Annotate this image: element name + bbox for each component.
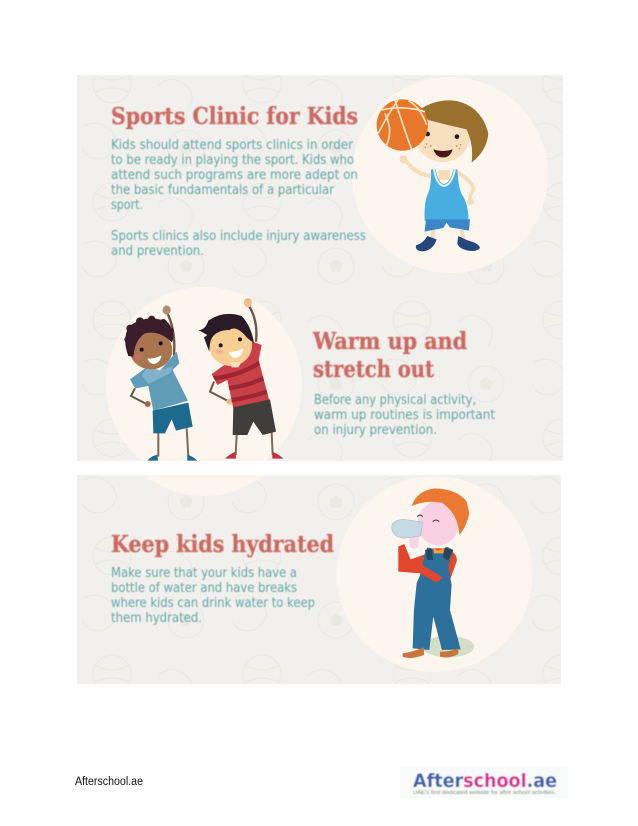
text block: warm up description: Before any physical activity, — [314, 393, 476, 408]
text block: sports clinic description: the basic fundamentals of a particular — [111, 183, 335, 198]
logo: Afterschool.ae: UAE's first dedicated website for after school activities. — [413, 790, 556, 796]
text block: sports clinic description: Sports clinics also include injury awareness — [111, 229, 366, 244]
text block: sports clinic description — [111, 138, 366, 259]
illustration: boy drinking water — [392, 488, 474, 658]
text block: sports clinic description: attend such programs are more adept on — [111, 168, 358, 183]
right boy — [198, 298, 283, 459]
logo: Afterschool.ae — [400, 767, 568, 799]
heading: Warm up and stretch out: stretch out — [313, 356, 434, 383]
left boy — [124, 305, 197, 461]
text block: hydration description: where kids can drink water to keep — [111, 596, 315, 611]
panel: keep kids hydrated — [77, 475, 561, 684]
text block: hydration description — [111, 566, 315, 626]
text block: warm up description: on injury prevention. — [314, 423, 437, 438]
text block: sports clinic description: to be ready in playing the sport. Kids who — [111, 153, 354, 168]
text block: hydration description: Make sure that your kids have a — [111, 566, 297, 581]
illustration: two kids stretching — [124, 298, 283, 461]
heading: Warm up and stretch out — [312, 328, 467, 383]
heading: Keep kids hydrated: Keep kids hydrated — [111, 531, 334, 558]
panel: sports clinic and warm up — [77, 75, 563, 483]
infographic page — [75, 75, 563, 795]
text block: hydration description: bottle of water and have breaks — [111, 581, 297, 596]
logo: Afterschool.ae: Afterschool.ae — [413, 770, 557, 792]
heading: Sports Clinic for Kids: Sports Clinic for Kids — [111, 103, 358, 130]
footer label: Afterschool.ae — [75, 776, 143, 788]
text block: sports clinic description: and prevention. — [111, 244, 204, 259]
text block: sports clinic description: Kids should attend sports clinics in order — [111, 138, 354, 153]
heading: Warm up and stretch out: Warm up and — [312, 328, 467, 355]
text block: sports clinic description: sport. — [111, 198, 143, 213]
text block: warm up description: warm up routines is important — [314, 408, 495, 423]
text block: warm up description — [314, 393, 495, 438]
text block: hydration description: them hydrated. — [111, 611, 202, 626]
illustration: boy spinning basketball — [377, 99, 488, 251]
